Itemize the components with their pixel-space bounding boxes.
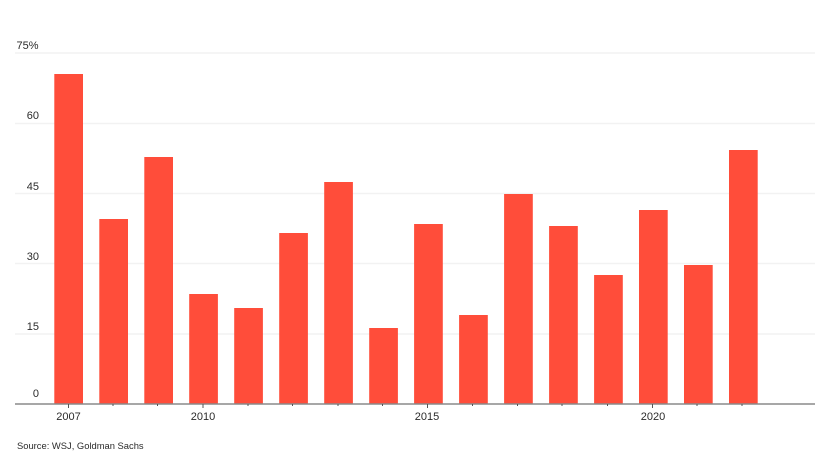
bars [54, 74, 758, 404]
x-axis labels: 2020 [641, 411, 665, 423]
x-axis labels: 2010 [191, 411, 215, 423]
x-axis labels: 2007 [56, 411, 81, 423]
y-axis labels: 60 [27, 110, 39, 122]
x-axis line and ticks [15, 404, 815, 408]
y-axis labels [16, 40, 39, 400]
source note: Source: WSJ, Goldman Sachs [17, 440, 144, 451]
y-axis labels: 45 [27, 181, 39, 193]
y-axis labels: 30 [27, 251, 39, 263]
y-axis labels: 0 [33, 388, 39, 400]
y-axis labels: 15 [27, 321, 39, 333]
x-axis labels: 2015 [415, 411, 439, 423]
x-axis labels [56, 411, 665, 423]
y-axis labels: 75% [16, 40, 39, 52]
